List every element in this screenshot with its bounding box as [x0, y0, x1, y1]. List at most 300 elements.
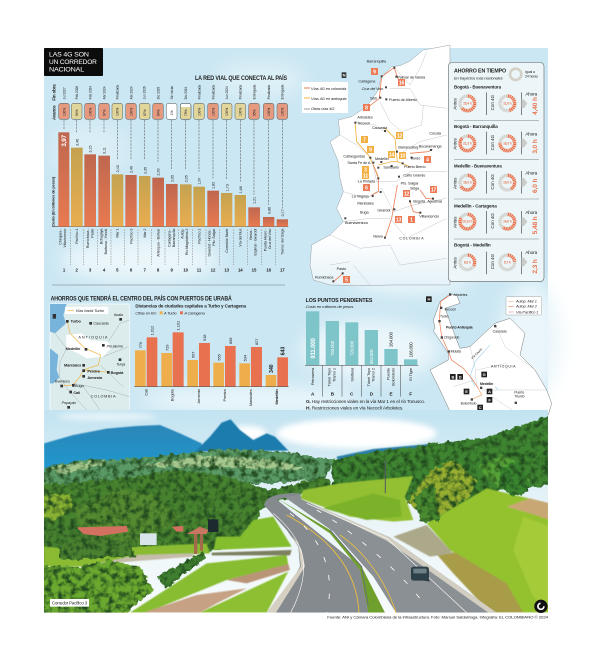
- map number markers: 12: [397, 134, 402, 140]
- bar chart: costo por proyecto: Villavicencio: [63, 229, 67, 248]
- bar chart: costo por proyecto: 0,86: [267, 207, 271, 214]
- bar chart: distancias: 868: [228, 337, 233, 344]
- map: Antioquia: Mutatá: [451, 350, 461, 354]
- avance and date chips row: 100%: [225, 108, 229, 116]
- photo caption: [50, 599, 89, 607]
- map number markers: 8: [365, 106, 368, 112]
- avance and date chips row: 100%: [129, 108, 133, 116]
- section: los puntos pendientes: Puente: [386, 367, 391, 380]
- section: los puntos pendientes: Primavera: [310, 367, 315, 385]
- section: ahorros Urabá: AHORROS QUE TENDRÁ EL CENTRO DEL PAÍS CON PUERTOS DE URABÁ: [51, 294, 232, 302]
- logo: El Colombiano: [534, 600, 548, 613]
- avance and date chips row: Avance: [51, 105, 56, 120]
- bar chart: costo por proyecto: 11: [197, 267, 202, 272]
- panel: ahorro en tiempo: 4,40 h: [532, 97, 539, 115]
- map: Antioquia: Turbo: [440, 314, 449, 318]
- avance and date chips row: Feb 2026: [75, 86, 79, 99]
- north arrow: [342, 72, 346, 78]
- map: Antioquia: Puerto: [514, 390, 524, 394]
- bar chart: costo por proyecto: Neiva -: [249, 228, 253, 240]
- section: los puntos pendientes: 563.000: [369, 349, 374, 364]
- map: Antioquia: Chigorodó: [444, 335, 459, 339]
- panel: ahorro en tiempo: AHORRO EN TIEMPO: [454, 68, 507, 74]
- panel: ahorro en tiempo: 5,7 h: [504, 260, 511, 264]
- avance and date chips row: Finalizada: [267, 85, 271, 99]
- map number markers: 16: [399, 80, 404, 86]
- map: Colombia: Barrancabej.: [398, 146, 419, 150]
- bar chart: costo por proyecto: Cruz del Viso: [268, 229, 272, 249]
- map: Urabá routes: Medellín: [66, 347, 81, 351]
- photo caption: Corredor Pacífico 3: [52, 600, 88, 605]
- section: los puntos pendientes: 911.000: [311, 338, 317, 359]
- bar chart: costo por proyecto: 1,21: [253, 197, 257, 204]
- section: los puntos pendientes: F: [409, 391, 412, 396]
- map: Colombia: Santa Fe de A.: [347, 161, 371, 165]
- bar chart: costo por proyecto: Pacífico 3: [129, 229, 133, 244]
- bar chart: costo por proyecto: Mar 2: [143, 229, 147, 238]
- map: Colombia: Caucasia: [372, 126, 388, 130]
- map: Colombia: Bucaramanga: [419, 144, 442, 148]
- map: Colombia: Cruz del Viso: [362, 87, 383, 91]
- map: Urabá routes: Manizales: [64, 364, 81, 368]
- bar chart: costo por proyecto: Bchagaya: [100, 228, 104, 244]
- photo: Corredor Pacífico 3 highway: [42, 410, 550, 619]
- avance and date chips row: Jun 2024: [225, 86, 229, 99]
- avance and date chips row: 100%: [116, 108, 120, 116]
- source credit: Fuente: ANI y Cámara Colombiana de la Infraestructura. Foto: Manuel Saldarriaga. Infografía: EL COLOMBIANO © 2024: [327, 614, 549, 619]
- avance and date chips row: 100%: [197, 108, 201, 116]
- avance and date chips row: 95%: [252, 109, 256, 116]
- heading: la red vial: LA RED VIAL QUE CONECTA AL PAÍS: [195, 73, 287, 82]
- map: Colombia: La Virginia: [352, 194, 370, 198]
- section: los puntos pendientes: Costo en millones de pesos: [306, 304, 353, 309]
- bar chart: costo por proyecto: 9: [170, 267, 173, 272]
- bar chart: costo por proyecto: 2,29: [157, 169, 161, 176]
- bar chart: distancias: 340: [269, 364, 275, 373]
- legend: autopistas: Autop. Mar 1: [515, 300, 537, 304]
- panel: ahorro en tiempo: Bogotá - Barranquilla: [454, 124, 498, 129]
- section: los puntos pendientes: Tramo 1: [331, 367, 336, 382]
- map: Urabá routes: Pereira: [87, 370, 101, 374]
- legend: vías Colombia: Otras vías 4G: [311, 106, 334, 111]
- panel: ahorro en tiempo: Antes: [452, 98, 457, 110]
- bar chart: costo por proyecto: Pacífico 2: [197, 229, 201, 244]
- bar chart: costo por proyecto: 10: [183, 267, 189, 272]
- avance and date chips row: 100%: [239, 108, 243, 116]
- bar chart: costo por proyecto: Rumichaca -: [86, 228, 90, 248]
- section: los puntos pendientes: G. Hay restricciones viales en la vía Mar 1 en el río Tonusco.: [306, 399, 425, 404]
- map: Antioquia: B: [451, 374, 454, 379]
- map: Colombia: Manizales: [357, 201, 374, 205]
- panel: ahorro en tiempo: Bogotá - Buenaventura: [454, 85, 502, 90]
- map: Antioquia: Arboletes: [453, 293, 468, 297]
- avance and date chips row: 97%: [102, 109, 106, 116]
- bar chart: costo por proyecto: 2,40: [130, 166, 134, 173]
- bar chart: costo por proyecto: 1,73: [225, 184, 229, 191]
- panel: ahorro en tiempo: Con 4G: [490, 213, 495, 229]
- avance and date chips row: 1%: [170, 111, 174, 115]
- panel: ahorro en tiempo: 8,0 h: [464, 260, 471, 264]
- car: [411, 567, 430, 582]
- section: los puntos pendientes: Tramo 2: [371, 367, 376, 382]
- section: los puntos pendientes: 284.000: [389, 331, 394, 347]
- legend: autopistas: Vía Pacífico 1: [516, 310, 538, 314]
- bar chart: distancias: Bogotá: [170, 388, 175, 401]
- bar chart: costo por proyecto: Pacífico 1: [75, 229, 79, 244]
- map: Colombia: Cartagena: [358, 80, 376, 84]
- map: Antioquia: Puerto Antioquia: [446, 325, 473, 329]
- legend: vías Colombia: Vías 4G en antioquia: [311, 96, 347, 101]
- map: Antioquia: E: [465, 389, 468, 394]
- bar chart: distancias: Medellín: [274, 389, 279, 404]
- map number markers: 1: [410, 218, 413, 224]
- section: ahorros Urabá: [50, 294, 289, 411]
- bar chart: costo por proyecto: 4: [103, 267, 106, 272]
- map: Colombia: [310, 45, 450, 286]
- panel: ahorro en tiempo: 11,0 h: [503, 101, 512, 105]
- map: Colombia: Barranquilla: [367, 59, 387, 63]
- title box: UN CORREDOR: [49, 60, 98, 66]
- bar chart: costo por proyecto: 1,66: [239, 186, 243, 193]
- map: Urabá routes: Vías hacia Turbo: [76, 308, 105, 313]
- bar chart: costo por proyecto: Transv. del Sisga: [281, 228, 285, 255]
- bar chart: costo por proyecto: 2,05: [170, 175, 174, 182]
- map: Colombia: La Pintada: [358, 179, 376, 183]
- bar chart: distancias: 827: [254, 338, 259, 345]
- bar chart: costo por proyecto: Cartagena -: [168, 228, 172, 247]
- map: Urabá routes: Pto.Berrío: [107, 344, 123, 348]
- panel: ahorro en tiempo: 16,0 h: [463, 181, 472, 185]
- panel: ahorro en tiempo: Antes: [452, 138, 457, 150]
- bar chart: costo por proyecto: 3,15: [89, 146, 93, 153]
- panel: ahorro en tiempo: 10,0 h: [503, 181, 512, 185]
- panel: ahorro en tiempo: Antes: [452, 257, 457, 269]
- legend ring 24 horas: [510, 69, 538, 80]
- map: Urabá routes: Caucasia: [93, 322, 109, 326]
- section: los puntos pendientes: D: [370, 391, 374, 396]
- map: Colombia: Girardot: [377, 209, 391, 213]
- avance and date chips row: Sin iniciar: [170, 85, 174, 99]
- bar chart: distancias: A Cartagena: [183, 311, 205, 315]
- bar chart: costo por proyecto: 17: [280, 267, 285, 272]
- bar chart: costo por proyecto: 12: [211, 267, 216, 272]
- map: Antioquia: Caucasia: [493, 329, 507, 333]
- avance and date chips row: 84%: [156, 109, 160, 116]
- bar chart: costo por proyecto: Barbosa - Yondó: [104, 229, 108, 254]
- map: Colombia: Medellín: [375, 157, 389, 161]
- bar chart: costo por proyecto: 3: [89, 267, 92, 272]
- avance and date chips row: 87%: [143, 109, 147, 116]
- panel: ahorro en tiempo: Con 4G: [490, 253, 495, 269]
- bar chart: costo por proyecto: Autop.: [181, 229, 185, 239]
- map: Urabá routes: Cali: [73, 391, 80, 395]
- map number markers: 13: [396, 218, 401, 224]
- map number markers: 5: [345, 278, 348, 284]
- map: Colombia: Pasto: [337, 267, 346, 271]
- map: Colombia: Necoclí: [358, 121, 371, 125]
- bar chart: costo por proyecto: 3,46: [75, 139, 79, 146]
- panel: ahorro en tiempo: Ahora: [525, 171, 538, 176]
- bar chart: costo por proyecto: 3,11: [103, 147, 107, 154]
- map: Urabá routes: ANTIOQUIA: [78, 335, 108, 339]
- bar chart: costo por proyecto: 14: [238, 267, 243, 272]
- avance and date chips row: 100%: [88, 108, 92, 116]
- bar chart: distancias: 607: [190, 351, 195, 358]
- avance and date chips row: Finalizada: [239, 85, 243, 99]
- map: Antioquia: Vía Cauca: [470, 347, 483, 360]
- panel: ahorro en tiempo: Con 4G: [490, 134, 495, 150]
- bar chart: costo por proyecto: Mar 1: [116, 229, 120, 238]
- bar chart: costo por proyecto: 6: [130, 267, 133, 272]
- map: Urabá routes: Bventura: [55, 380, 71, 384]
- map: Urabá routes: Ituala: [114, 313, 123, 317]
- bar chart: costo por proyecto: 2: [76, 267, 79, 272]
- section: los puntos pendientes: H. Restricciones viales en vía Necoclí Arboletes.: [306, 405, 403, 410]
- map: Urabá routes: Bogotá: [111, 371, 124, 375]
- map: Colombia: Pto. Salgar: [401, 181, 419, 185]
- bar chart: costo por proyecto: Río Magdalena 2: [185, 229, 189, 255]
- map: Colombia: Cañasgordas: [343, 155, 365, 159]
- panel: ahorro en tiempo: Ahora: [525, 210, 538, 215]
- avance and date chips row: Finalizada: [197, 85, 201, 99]
- map number markers: 7: [363, 138, 366, 144]
- bar chart: distancias: Distancias de ciudades capitales a Turbo y Cartagena: [135, 304, 246, 309]
- map: Urabá routes: Buga: [75, 384, 85, 388]
- panel: ahorro en tiempo: Ahora: [525, 91, 538, 96]
- panel: ahorro en tiempo: 6,0 h: [532, 179, 539, 193]
- bar chart: distancias: 1.012: [150, 325, 155, 335]
- bar chart: costo por proyecto: Chirajara -: [59, 228, 63, 245]
- bar chart: costo por proyecto: 0,77: [281, 209, 285, 216]
- bar chart: distancias: 729: [164, 344, 169, 351]
- bar chart: distancias: Pereira: [222, 388, 227, 401]
- section: los puntos pendientes: Sinifaná: [349, 367, 354, 382]
- panel: ahorro en tiempo: Medellín - Cartagena: [454, 203, 497, 208]
- map: Antioquia: G: [483, 372, 486, 377]
- panel: ahorro en tiempo: 3,0 h: [532, 139, 539, 154]
- avance and date chips row: Fin obra: [51, 84, 56, 101]
- panel: ahorro en tiempo: 5,48 h: [532, 216, 539, 234]
- bar chart: distancias: A Turbo: [163, 311, 177, 315]
- panel: ahorro en tiempo: En trayectos más nacionales: [454, 77, 503, 81]
- bar chart: costo por proyecto: Pto. Salgar: [212, 228, 216, 246]
- section: los puntos pendientes: 106.000: [408, 342, 413, 357]
- map: Urabá routes: COLOMBIA: [91, 394, 116, 398]
- section: los puntos pendientes: B: [331, 391, 335, 396]
- panel: ahorro en tiempo: 18,3 h: [503, 141, 512, 145]
- map number markers: 17: [431, 188, 436, 194]
- map: Colombia: Cúcuta: [429, 131, 442, 135]
- legend: vías Colombia: [302, 82, 348, 113]
- map number markers: 14: [389, 152, 394, 158]
- map: Colombia: Palmar de Varela: [397, 75, 426, 79]
- panel: ahorro en tiempo: 21,3 h: [463, 141, 472, 145]
- map number markers: 9: [373, 70, 376, 76]
- section: los puntos pendientes: [305, 298, 425, 410]
- bar chart: costo por proyecto: Costo (En billones de pesos): [52, 176, 56, 227]
- section: los puntos pendientes: 720.000: [350, 340, 355, 356]
- avance and date chips row: 100%: [211, 108, 215, 116]
- avance and date chips row: 100%: [267, 108, 271, 116]
- avance and date chips row: Dic 2025: [156, 87, 160, 99]
- map: Colombia: Arboletes: [357, 115, 373, 119]
- panel: ahorro en tiempo: Antes: [452, 177, 457, 189]
- map: Urabá routes: [50, 304, 129, 411]
- map: Antioquia: ANTIOQUIA: [491, 364, 516, 368]
- panel: ahorro en tiempo: 15,4 h: [463, 101, 472, 105]
- panel: ahorro en tiempo: Ahora: [525, 131, 538, 136]
- map: Antioquia: Necoclí: [445, 308, 456, 312]
- map number markers: 3: [364, 168, 367, 174]
- bar chart: distancias: 1.101: [176, 320, 181, 330]
- bar chart: distancias: 534: [242, 354, 247, 361]
- map: Antioquia: D: [459, 374, 462, 379]
- road: [264, 493, 497, 613]
- avance and date chips row: 100%: [281, 108, 285, 116]
- avance and date chips row: Finalizada: [211, 85, 215, 99]
- bar chart: costo por proyecto: 5: [116, 267, 119, 272]
- building and gazebo: [77, 519, 218, 554]
- map number markers: 10: [400, 154, 405, 160]
- map: Colombia: Villavicencio: [419, 215, 439, 219]
- avance and date chips row: [51, 84, 288, 120]
- section: los puntos pendientes: A: [311, 391, 315, 396]
- legend ring 24 horas: Igual a: [525, 70, 535, 74]
- map: Colombia: Puerto Berrío: [404, 165, 426, 169]
- bar chart: distancias: Armenia: [196, 388, 201, 403]
- bar chart: distancias: Cali: [143, 389, 148, 396]
- map: Colombia: Buga: [360, 210, 370, 214]
- map: Colombia: Rumichaca: [315, 275, 334, 279]
- map: Colombia: Neiva: [373, 235, 384, 239]
- section: los puntos pendientes: Túnel Toyo: [366, 367, 371, 386]
- panel: ahorro en tiempo: Bogotá - Medellín: [454, 243, 491, 248]
- map: Antioquia: A: [488, 389, 491, 394]
- panel: ahorro en tiempo: Medellín - Buenaventura: [454, 163, 502, 168]
- foreground trees: [42, 460, 530, 615]
- map: Urabá routes: Armenia: [87, 376, 103, 380]
- map: Colombia: Yondó: [410, 156, 420, 160]
- map: Urabá routes: Tunja: [116, 362, 125, 366]
- map: Antioquia: H: [427, 297, 430, 302]
- map number markers: 6: [365, 186, 368, 192]
- map: Colombia: Puerto de Alberto: [389, 98, 417, 102]
- panel: ahorro en tiempo: 20,12 h: [462, 220, 473, 224]
- bar chart: distancias: 555: [216, 353, 221, 361]
- map: Colombia: Caño Grande: [403, 174, 425, 178]
- map: Colombia: Buenaventura: [345, 221, 369, 225]
- avance and date chips row: Finalizada: [116, 85, 120, 99]
- avance and date chips row: Dic 2024: [184, 87, 188, 99]
- panel: ahorro en tiempo: [448, 62, 544, 282]
- avance and date chips row: Abr 2024: [102, 86, 106, 99]
- bar chart: distancias: 643: [281, 347, 287, 355]
- bar chart: costo por proyecto: Espinal - Girardot: [253, 229, 257, 255]
- bar chart: costo por proyecto: Puerta Hierro -: [264, 228, 268, 251]
- section: los puntos pendientes: C: [350, 391, 354, 396]
- map number markers: [343, 68, 437, 284]
- legend: autopistas: [506, 297, 542, 315]
- bar chart: costo por proyecto: 1,97: [198, 178, 202, 185]
- bar chart: costo por proyecto: Pasto: [90, 229, 94, 238]
- bar chart: costo por proyecto: 2,43: [116, 165, 120, 172]
- bar chart: costo por proyecto: 1: [63, 267, 66, 272]
- avance and date chips row: Feb 2024: [88, 86, 92, 99]
- title box: LAS 4G SON: [49, 53, 89, 59]
- avance and date chips row: 75%: [184, 109, 188, 116]
- bar chart: costo por proyecto: Girardot - Honda -: [208, 228, 212, 256]
- bar chart: distancias: Manizales: [248, 389, 253, 406]
- panel: ahorro en tiempo: Antes: [452, 216, 457, 228]
- hills and trees: [42, 415, 550, 563]
- panel: ahorro en tiempo: 2,3 h: [532, 259, 539, 274]
- avance and date chips row: Jul 2027: [62, 87, 66, 99]
- bar chart: distancias: Cifras en Km: [135, 311, 157, 315]
- map: Colombia: Sisli: [370, 96, 377, 100]
- section: los puntos pendientes: El Tigre: [408, 367, 413, 381]
- section: los puntos pendientes: 750.000: [330, 340, 335, 356]
- panel: ahorro en tiempo: 14,0 h: [503, 220, 512, 224]
- bar chart: costo por proyecto: 2,05: [184, 175, 188, 182]
- panel: ahorro en tiempo: Con 4G: [490, 94, 495, 110]
- avance and date chips row: 94%: [75, 109, 79, 116]
- north arrow: N: [343, 73, 346, 78]
- avance and date chips row: 100%: [62, 108, 66, 116]
- panel: ahorro en tiempo: Ahora: [525, 250, 538, 255]
- avance and date chips row: Entregada: [252, 84, 256, 99]
- bar chart: costo por proyecto: Barranquilla: [172, 228, 176, 247]
- bar chart: distancias: 918: [202, 334, 207, 341]
- panel: ahorro en tiempo: Con 4G: [490, 174, 495, 190]
- map: Colombia: Sisga: [410, 186, 420, 190]
- map: Antioquia: Triunfo: [514, 395, 525, 399]
- map number markers: 4: [426, 158, 429, 164]
- map: Urabá routes: Turbo: [71, 319, 82, 323]
- page background panel: [44, 48, 560, 416]
- bar chart: costo por proyecto: Conexión Norte: [225, 229, 229, 253]
- map: Urabá routes: Popayán: [62, 401, 76, 405]
- avance and date chips row: Entregada: [281, 84, 285, 99]
- section: los puntos pendientes: Bolombolo: [390, 367, 395, 386]
- legend: vías Colombia: Vías 4G en colombia: [311, 86, 347, 91]
- map: Antioquia: Medellín: [480, 382, 493, 386]
- section: los puntos pendientes: E: [389, 391, 392, 396]
- bar chart: costo por proyecto: 7: [143, 267, 146, 272]
- legend: autopistas: Autop. Mar 2: [515, 305, 538, 309]
- map number markers: 11: [363, 174, 368, 180]
- map: Colombia: Santuario: [383, 165, 399, 169]
- map: Antioquia: Bolombolo: [461, 402, 476, 406]
- bar chart: costo por proyecto: Antioquia - Bolívar: [156, 228, 160, 257]
- map: Colombia: Bogotá: [413, 199, 426, 203]
- map number markers: 9: [369, 148, 372, 154]
- bar chart: costo por proyecto: 13: [224, 267, 230, 272]
- map: Antioquia: F: [488, 397, 491, 402]
- map number markers: 12: [404, 192, 409, 198]
- bar chart: costo por proyecto: 16: [266, 267, 272, 272]
- map: Antioquia: [426, 293, 552, 415]
- bar chart: costo por proyecto: 15: [252, 267, 257, 272]
- bar chart: distancias: 779: [138, 341, 143, 348]
- map: Colombia: Aguazinas: [427, 200, 443, 204]
- section: los puntos pendientes: Túnel Toyo: [327, 367, 332, 386]
- avance and date chips row: Abr 2024: [129, 86, 133, 99]
- map: Colombia: COLOMBIA: [399, 236, 424, 240]
- map: Antioquia: C: [479, 405, 482, 410]
- bar chart: costo por proyecto: 3,97: [61, 134, 68, 147]
- section: los puntos pendientes: LOS PUNTOS PENDIENTES: [306, 298, 373, 304]
- title box: [44, 48, 103, 76]
